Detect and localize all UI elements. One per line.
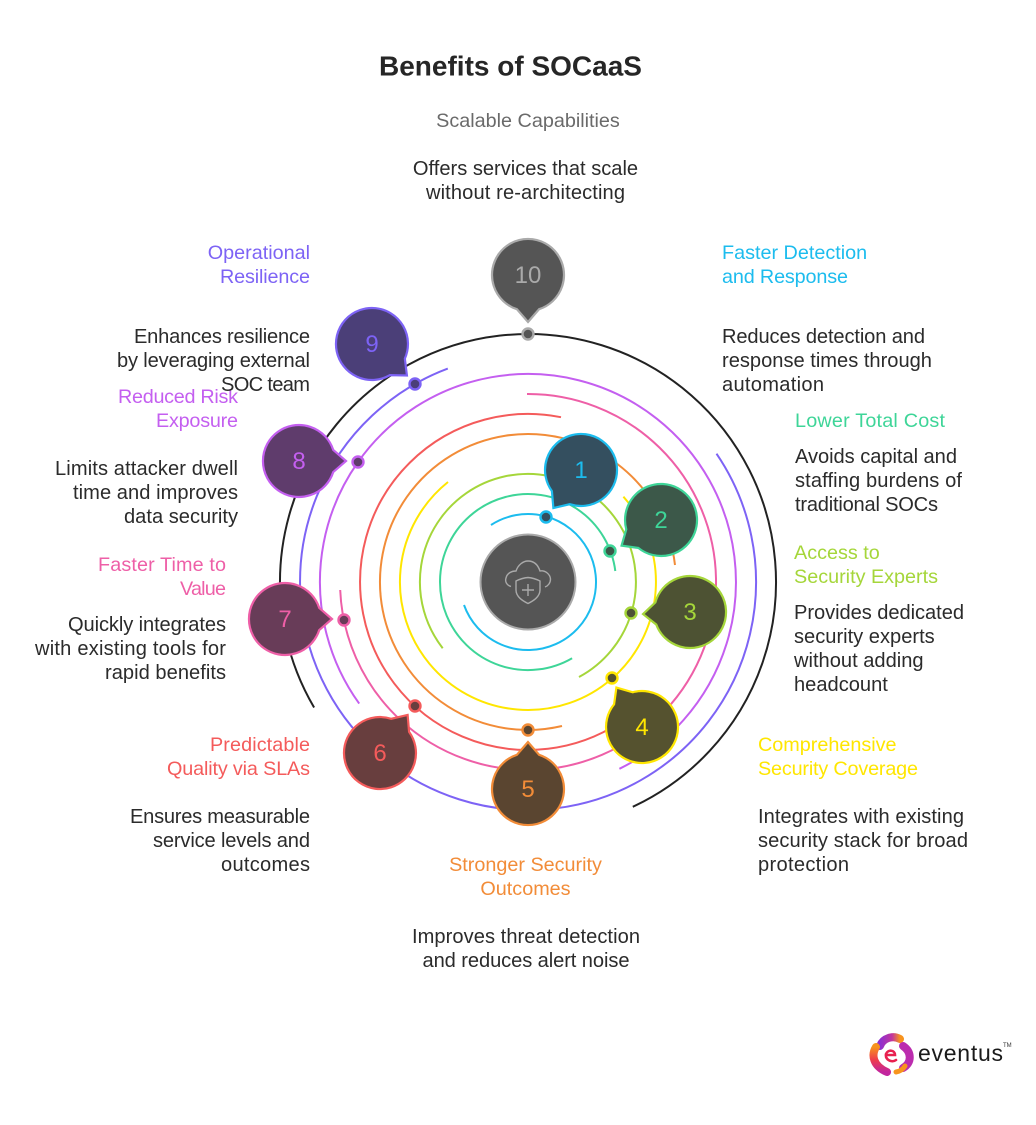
logo: eventus: TM xyxy=(1003,1043,1012,1049)
text: scalable capabilities: Scalable Capabilities xyxy=(436,110,620,132)
bubble 5 xyxy=(492,742,564,825)
text: scalable capabilities: without re-architecting xyxy=(425,182,625,204)
text: lower total cost: Lower Total Cost xyxy=(795,410,946,432)
text: scalable capabilities: Offers services that scale xyxy=(413,158,638,180)
bubble 7: 7 xyxy=(278,606,292,633)
text: comprehensive security coverage: security stack for broad xyxy=(758,830,968,852)
concentric rings xyxy=(280,334,776,810)
bubble 6: 6 xyxy=(373,740,387,767)
text: operational resilience: by leveraging external xyxy=(117,350,310,372)
text: comprehensive security coverage xyxy=(758,734,968,876)
text: operational resilience: SOC team xyxy=(221,374,310,396)
text: predictable quality: Ensures measurable xyxy=(130,806,310,828)
text: lower total cost: Avoids capital and xyxy=(795,446,957,468)
text: reduced risk exposure: Exposure xyxy=(156,410,238,432)
text: reduced risk exposure xyxy=(55,386,238,528)
bubble 4 xyxy=(586,668,692,777)
text: access to security experts: Security Experts xyxy=(794,566,938,588)
text: access to security experts: security experts xyxy=(794,626,935,648)
text: faster detection and response: Reduces detection and xyxy=(722,326,925,348)
text: faster detection and response: Faster Detection xyxy=(722,242,867,264)
text: lower total cost xyxy=(795,410,962,516)
text: reduced risk exposure: time and improves xyxy=(73,482,238,504)
text: operational resilience: Enhances resilience xyxy=(134,326,310,348)
bubble 10: 10 xyxy=(515,262,541,289)
text: reduced risk exposure: data security xyxy=(124,506,238,528)
text: predictable quality: service levels and xyxy=(153,830,310,852)
bubble 2: 2 xyxy=(654,507,668,534)
bubble 9: 9 xyxy=(365,331,379,358)
marker dots xyxy=(338,328,636,736)
text: faster time to value: Quickly integrates xyxy=(68,614,226,636)
text: access to security experts: Provides dedicated xyxy=(794,602,964,624)
logo: eventus: eventus xyxy=(918,1040,1003,1066)
text: stronger security outcomes: Stronger Security xyxy=(449,854,602,876)
bubble 8 xyxy=(263,425,346,497)
text: stronger security outcomes: Improves threat detection xyxy=(412,926,640,948)
center icon: cloud shield xyxy=(480,534,576,630)
text: lower total cost: staffing burdens of xyxy=(795,470,962,492)
text: comprehensive security coverage: Comprehensive xyxy=(758,734,897,756)
text: predictable quality: outcomes xyxy=(221,854,310,876)
text: faster detection and response xyxy=(722,242,932,396)
bubble 6 xyxy=(330,694,437,803)
bubble 1 xyxy=(524,420,631,529)
text: comprehensive security coverage: Integrates with existing xyxy=(758,806,964,828)
text: reduced risk exposure: Reduced Risk xyxy=(118,386,238,408)
text: faster time to value: with existing tools for xyxy=(34,638,226,660)
bubble 2 xyxy=(602,470,711,576)
text: faster time to value xyxy=(34,554,226,684)
text: stronger security outcomes: and reduces alert noise xyxy=(422,950,630,972)
logo: eventus xyxy=(874,1037,1012,1072)
text: operational resilience: Resilience xyxy=(220,266,310,288)
text: operational resilience: Operational xyxy=(208,242,310,264)
text: faster detection and response: and Response xyxy=(722,266,848,288)
text: reduced risk exposure: Limits attacker dwell xyxy=(55,458,238,480)
text: faster time to value: Value xyxy=(180,578,226,600)
bubble 3 xyxy=(641,574,728,650)
bubble 9 xyxy=(321,293,431,402)
text: predictable quality: Predictable xyxy=(210,734,310,756)
bubble 1: 1 xyxy=(574,457,588,484)
text: lower total cost: traditional SOCs xyxy=(795,494,938,516)
text: faster time to value: Faster Time to xyxy=(98,554,226,576)
bubble 10 xyxy=(492,239,564,322)
bubble 5: 5 xyxy=(521,776,535,803)
text: comprehensive security coverage: protection xyxy=(758,854,849,876)
text: access to security experts xyxy=(793,542,964,696)
text: stronger security outcomes xyxy=(412,854,640,972)
bubble 7 xyxy=(249,583,332,655)
text: stronger security outcomes: Outcomes xyxy=(480,878,571,900)
text: faster time to value: rapid benefits xyxy=(105,662,226,684)
text: comprehensive security coverage: Security Coverage xyxy=(758,758,918,780)
text: operational resilience xyxy=(117,242,310,396)
text: scalable capabilities xyxy=(413,110,638,204)
text: predictable quality: Quality via SLAs xyxy=(167,758,310,780)
text: access to security experts: headcount xyxy=(794,674,888,696)
text: predictable quality xyxy=(130,734,310,876)
bubble 4: 4 xyxy=(635,714,649,741)
bubble 8: 8 xyxy=(292,448,306,475)
bubble 3: 3 xyxy=(683,599,697,626)
text: faster detection and response: response times through xyxy=(722,350,932,372)
text: access to security experts: Access to xyxy=(794,542,880,564)
title: Benefits of SOCaaS xyxy=(379,50,642,82)
text: access to security experts: without adding xyxy=(793,650,924,672)
text: faster detection and response: automation xyxy=(722,374,824,396)
